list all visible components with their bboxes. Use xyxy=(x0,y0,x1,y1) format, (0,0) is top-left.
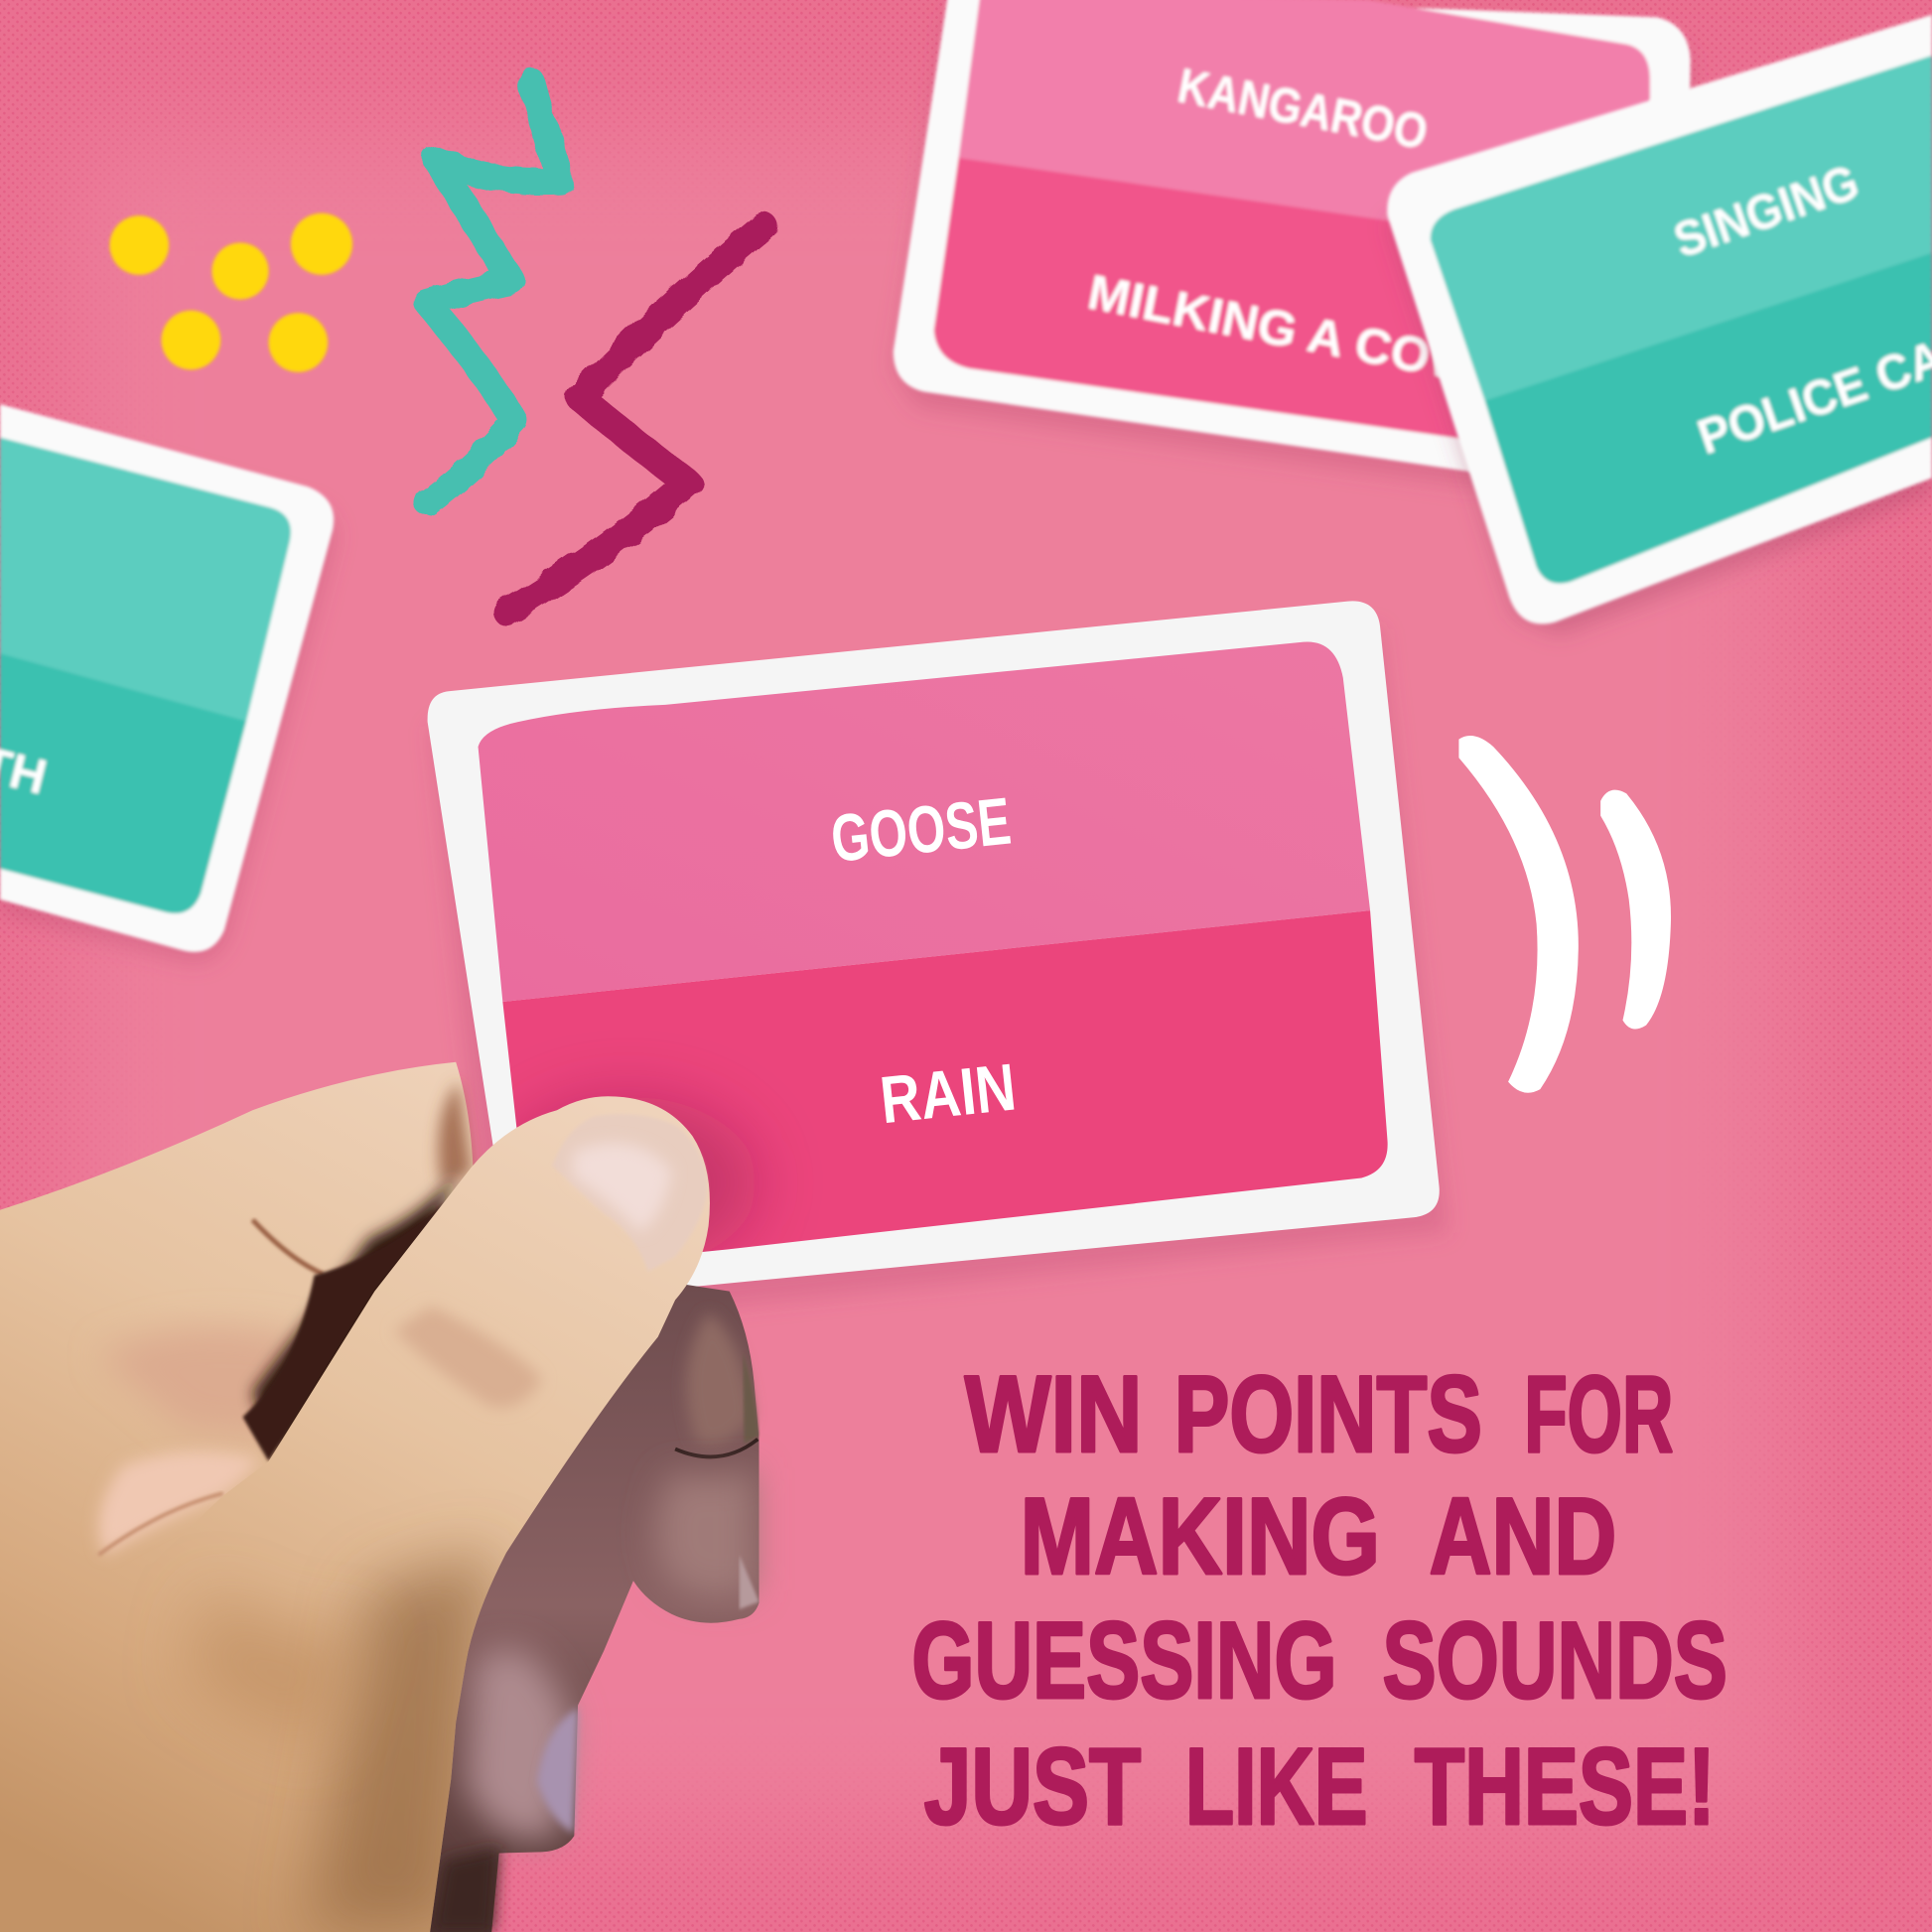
scribble: teal zigzag xyxy=(426,81,561,502)
headline: win points: MAKING xyxy=(1021,1476,1380,1597)
headline: win points: JUST xyxy=(924,1726,1141,1848)
hand: lower fingers xyxy=(419,1282,759,1932)
hand: thumb xyxy=(123,1096,710,1932)
headline: win points: SOUNDS xyxy=(1382,1600,1727,1722)
card text: singing: SINGING xyxy=(1667,154,1865,268)
hand: dark shadow in grip xyxy=(242,1171,471,1461)
scribble: maroon zigzag xyxy=(507,226,763,613)
card text: goose: GOOSE xyxy=(828,784,1015,877)
card: top pink (blurred) xyxy=(894,0,1694,486)
hand holding the card xyxy=(0,1059,759,1932)
headline: win points: LIKE xyxy=(1185,1726,1368,1848)
hand: thumbnail xyxy=(552,1114,707,1272)
headline: win points: GUESSING xyxy=(911,1600,1337,1722)
card text: kangaroo: KANGAROO xyxy=(1173,58,1432,160)
scribble: yellow dots xyxy=(109,213,352,372)
card text: rain: RAIN xyxy=(877,1049,1020,1138)
headline: win points: THESE! xyxy=(1415,1726,1716,1848)
card text: milking a cow: MILKING A COW xyxy=(1083,264,1481,394)
card: right teal (blurred) xyxy=(1387,15,1932,634)
headline: win points: WIN xyxy=(965,1354,1142,1475)
hand: palm and index finger xyxy=(0,1062,474,1932)
headline: win points: POINTS xyxy=(1174,1354,1482,1475)
headline: win points: AND xyxy=(1430,1476,1616,1597)
headline: win points: FOR xyxy=(1524,1354,1673,1475)
sound waves xyxy=(1458,736,1671,1093)
headline: win points xyxy=(911,1354,1727,1848)
card: left teal (blurred) xyxy=(0,404,335,962)
main card xyxy=(428,601,1448,1309)
